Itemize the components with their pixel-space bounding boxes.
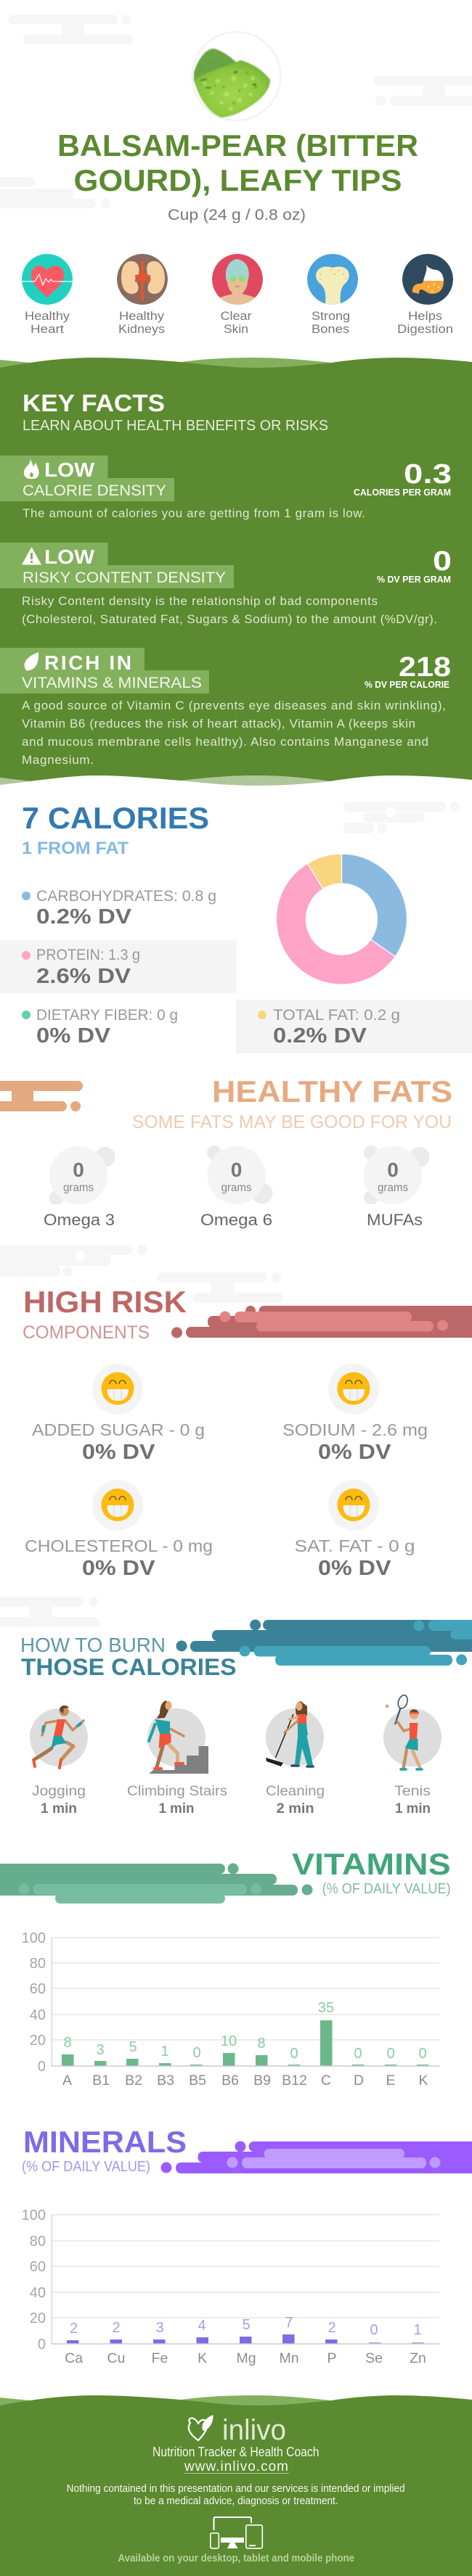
bar chart: minerals: 40	[30, 2285, 46, 2301]
heading: vitamins: VITAMINS	[292, 1847, 451, 1881]
serving size: Cup (24 g / 0.8 oz)	[168, 207, 306, 223]
callout: rich in vitamins and minerals: VITAMINS & MINERALS	[22, 674, 202, 691]
callout: risky content density: Risky Content density is the relationship of bad components	[22, 594, 378, 608]
activity: jogging: 1 min	[41, 1801, 77, 1816]
activity: tennis: 1 min	[395, 1801, 431, 1816]
activity: cleaning: 2 min	[277, 1801, 314, 1816]
bar chart: minerals: Se	[365, 2350, 383, 2366]
bar chart: minerals: 4	[198, 2318, 206, 2334]
tagline: Nutrition Tracker & Health Coach	[152, 2445, 320, 2459]
bar chart: vitamins: 0	[418, 2046, 427, 2062]
bar chart: vitamins: A	[62, 2073, 72, 2089]
bar chart: vitamins: K	[418, 2073, 428, 2089]
label: healthy kidneys: Healthy	[119, 309, 165, 323]
callout: rich in vitamins and minerals: Magnesium.	[22, 753, 94, 767]
legend: dietary fiber: DIETARY FIBER: 0 g	[36, 1007, 178, 1024]
bar chart: vitamins: B9	[253, 2073, 271, 2089]
bar chart: minerals: Zn	[410, 2350, 426, 2366]
callout: calorie density: The amount of calories you are getting from 1 gram is low.	[23, 506, 365, 520]
callout: rich in vitamins and minerals: A good source of Vitamin C (prevents eye diseases and skin wrinkling),	[22, 699, 446, 712]
bar chart: vitamins: B2	[125, 2073, 142, 2089]
bar chart: vitamins: B12	[282, 2073, 307, 2089]
heading: high risk: HIGH RISK	[23, 1285, 187, 1319]
bar chart: vitamins: 80	[30, 1956, 46, 1972]
stat: mufas: grams	[378, 1182, 408, 1194]
decorative band: minerals	[161, 2141, 472, 2173]
stat: mufas	[364, 1145, 430, 1229]
legend: total fat: TOTAL FAT: 0.2 g	[273, 1007, 400, 1024]
bar chart: minerals: 0	[370, 2322, 378, 2338]
bar chart: vitamins: B1	[92, 2073, 110, 2089]
heading: how to burn: HOW TO BURN	[20, 1634, 166, 1656]
stat: omega 3	[44, 1146, 115, 1229]
icon: healthy heart	[22, 254, 73, 305]
bar chart: vitamins: 0	[354, 2046, 362, 2062]
bar chart: vitamins: B5	[189, 2073, 206, 2089]
bar chart: vitamins: E	[386, 2073, 396, 2089]
bar chart: minerals: 2	[327, 2320, 336, 2336]
risk: sodium: SODIUM - 2.6 mg	[282, 1420, 428, 1439]
bar chart: vitamins: 8	[257, 2036, 266, 2052]
callout: risky content density: RISKY CONTENT DENSITY	[23, 569, 226, 586]
bar chart: minerals: Cu	[107, 2350, 125, 2366]
bar chart: minerals: 2	[70, 2321, 78, 2337]
bar chart: minerals: 100	[22, 2207, 46, 2223]
callout: risky content density: LOW	[44, 546, 95, 568]
risk: sodium	[282, 1364, 428, 1464]
activity: cleaning	[266, 1701, 325, 1816]
label: healthy heart: Healthy	[25, 309, 70, 323]
legend: protein: 2.6% DV	[36, 965, 131, 988]
callout: calorie density: CALORIE DENSITY	[23, 482, 166, 499]
food photo	[192, 32, 280, 120]
bar chart: vitamins: 100	[22, 1930, 46, 1946]
label: strong bones: Strong	[312, 309, 350, 323]
risk: saturated fat	[295, 1480, 415, 1580]
bar chart: minerals: 0	[38, 2337, 46, 2353]
subheading: components: COMPONENTS	[23, 1322, 150, 1343]
bar chart: vitamins	[22, 1930, 439, 2089]
bar chart: minerals: 3	[155, 2320, 164, 2336]
availability note: Available on your desktop, tablet and mobile phone	[118, 2552, 354, 2564]
heading: calories: 7 CALORIES	[22, 801, 209, 835]
callout: rich in vitamins and minerals: 218	[399, 652, 451, 683]
decorative band: vitamins	[0, 1863, 312, 1904]
label: strong bones: Bones	[312, 322, 349, 336]
risk: cholesterol	[25, 1480, 213, 1580]
legend: carbohydrates: CARBOHYDRATES: 0.8 g	[36, 888, 216, 905]
bar chart: minerals	[22, 2207, 439, 2366]
label: healthy kidneys: Kidneys	[118, 322, 165, 336]
stat: omega 3: grams	[63, 1182, 94, 1194]
bar chart: vitamins: 0	[290, 2046, 298, 2062]
callout: rich in vitamins and minerals	[0, 648, 451, 767]
risk: added sugar	[32, 1364, 205, 1464]
callout: risky content density: (Cholesterol, Saturated Fat, Sugars & Sodium) to the amount (%DV/gr).	[22, 612, 437, 626]
subheading: from fat: 1 FROM FAT	[22, 839, 129, 858]
decorative band: high risk	[171, 1306, 472, 1338]
risk: cholesterol: 0% DV	[82, 1557, 155, 1580]
legend: total fat	[236, 1000, 472, 1053]
risk: saturated fat: SAT. FAT - 0 g	[295, 1536, 415, 1555]
icon: strong bones	[307, 254, 358, 305]
stat: omega 6: Omega 6	[200, 1211, 272, 1229]
activity: tennis	[383, 1694, 442, 1816]
bar chart: vitamins: 0	[38, 2059, 46, 2075]
callout: risky content density: % DV PER GRAM	[377, 574, 451, 585]
bar chart: vitamins: 8	[63, 2035, 72, 2051]
label: helps digestion	[397, 309, 453, 336]
activity: climbing stairs: Climbing Stairs	[127, 1783, 227, 1799]
activity: jogging: Jogging	[32, 1783, 86, 1799]
risk: sodium: 0% DV	[318, 1441, 391, 1464]
activity: climbing stairs	[127, 1700, 227, 1816]
stat: omega 3: Omega 3	[44, 1211, 115, 1229]
icon: helps digestion	[402, 254, 453, 305]
risk: added sugar: 0% DV	[82, 1441, 155, 1464]
activity: climbing stairs: 1 min	[158, 1801, 195, 1816]
bar chart: vitamins: 35	[318, 2000, 334, 2016]
bar chart: vitamins: 10	[221, 2033, 237, 2049]
bar chart: vitamins: 20	[30, 2033, 46, 2049]
heading: minerals: MINERALS	[23, 2125, 187, 2159]
title	[57, 128, 418, 197]
label: clear skin: Clear	[221, 309, 252, 323]
activity: jogging	[30, 1705, 88, 1816]
title: GOURD), LEAFY TIPS	[74, 163, 402, 197]
icon: devices	[211, 2517, 262, 2548]
activity: cleaning: Cleaning	[266, 1783, 325, 1799]
logo: inlivo: inlivo	[222, 2414, 286, 2446]
bar chart: minerals: 60	[30, 2259, 46, 2275]
callout: rich in vitamins and minerals: Vitamin B6 (reduces the risk of heart attack), Vitamin A (keeps skin	[22, 717, 415, 731]
donut chart	[276, 854, 407, 984]
icon: healthy kidneys	[117, 254, 168, 305]
stat: mufas: 0	[387, 1159, 399, 1181]
disclaimer	[67, 2482, 405, 2507]
callout: risky content density	[0, 543, 452, 626]
callout: rich in vitamins and minerals: % DV PER CALORIE	[365, 679, 449, 690]
logo: inlivo	[189, 2414, 286, 2446]
stat: omega 6: 0	[231, 1159, 242, 1181]
bar chart: minerals: 20	[30, 2310, 46, 2326]
bar chart: minerals: 2	[112, 2320, 121, 2336]
stat: omega 6	[200, 1145, 273, 1229]
disclaimer: to be a medical advice, diagnosis or treatment.	[134, 2495, 338, 2507]
callout: calorie density: 0.3	[404, 459, 452, 490]
bar chart: minerals: Fe	[152, 2350, 168, 2366]
legend: carbohydrates	[22, 888, 216, 929]
heading: key facts: KEY FACTS	[23, 390, 165, 416]
bar chart: minerals: K	[198, 2350, 207, 2366]
risk: saturated fat: 0% DV	[318, 1557, 391, 1580]
legend: protein	[0, 940, 237, 993]
legend: total fat: 0.2% DV	[273, 1024, 367, 1048]
title: BALSAM-PEAR (BITTER	[57, 128, 418, 162]
callout: rich in vitamins and minerals: and mucous membrane cells healthy). Also contains Manganese and	[22, 735, 428, 749]
label: healthy kidneys	[118, 309, 165, 336]
callout: rich in vitamins and minerals: RICH IN	[44, 651, 131, 674]
stat: omega 6: grams	[221, 1182, 251, 1194]
bar chart: vitamins: 1	[160, 2044, 169, 2059]
callout: calorie density: LOW	[44, 458, 95, 481]
disclaimer: Nothing contained in this presentation and our services is intended or implied	[67, 2482, 405, 2495]
subheading: minerals: (% OF DAILY VALUE)	[22, 2159, 150, 2175]
subheading: healthy fats: SOME FATS MAY BE GOOD FOR YOU	[132, 1112, 452, 1132]
bar chart: vitamins: 60	[30, 1981, 46, 1997]
bar chart: vitamins: 3	[96, 2042, 105, 2058]
bar chart: minerals: Mg	[236, 2350, 256, 2366]
decorative band: healthy fats	[0, 1081, 83, 1111]
heading: healthy fats: HEALTHY FATS	[212, 1074, 452, 1108]
stat: mufas: MUFAs	[367, 1211, 423, 1229]
label: strong bones	[312, 309, 350, 336]
bar chart: vitamins: 5	[129, 2039, 137, 2055]
legend: dietary fiber	[22, 1007, 178, 1048]
subheading: key facts: LEARN ABOUT HEALTH BENEFITS OR RISKS	[23, 418, 328, 434]
bar chart: vitamins: B3	[157, 2073, 174, 2089]
panel: key facts	[0, 358, 472, 786]
legend: dietary fiber: 0% DV	[36, 1024, 110, 1048]
website link: www.inlivo.com	[184, 2459, 288, 2474]
bar chart: minerals: 80	[30, 2234, 46, 2250]
panel: footer	[0, 2395, 472, 2576]
label: clear skin: Skin	[224, 322, 248, 336]
bar chart: vitamins: B6	[221, 2073, 239, 2089]
callout: risky content density: 0	[433, 546, 452, 577]
label: healthy heart: Heart	[30, 322, 64, 336]
bar chart: minerals: 7	[285, 2315, 293, 2331]
callout: calorie density	[0, 456, 452, 520]
bar chart: minerals: Ca	[65, 2350, 83, 2366]
activity: tennis: Tenis	[394, 1783, 431, 1799]
bar chart: vitamins: D	[354, 2073, 364, 2089]
legend: protein: PROTEIN: 1.3 g	[36, 947, 140, 963]
bar chart: vitamins: 0	[192, 2045, 201, 2061]
bar chart: vitamins: C	[321, 2073, 331, 2089]
heading: those calories: THOSE CALORIES	[21, 1654, 237, 1680]
risk: added sugar: ADDED SUGAR - 0 g	[32, 1420, 205, 1439]
label: clear skin	[221, 309, 252, 336]
subheading: vitamins: (% OF DAILY VALUE)	[322, 1881, 451, 1897]
icon: clear skin	[212, 254, 263, 305]
callout: calorie density: CALORIES PER GRAM	[354, 487, 451, 498]
bar chart: vitamins: 40	[30, 2007, 46, 2023]
label: helps digestion: Helps	[408, 309, 442, 323]
bar chart: minerals: 5	[242, 2317, 251, 2333]
stat: omega 3: 0	[73, 1159, 84, 1181]
legend: carbohydrates: 0.2% DV	[36, 905, 131, 929]
bar chart: vitamins: 0	[386, 2046, 395, 2062]
bar chart: minerals: 1	[413, 2322, 422, 2338]
label: helps digestion: Digestion	[397, 322, 453, 336]
bar chart: minerals: Mn	[279, 2350, 299, 2366]
decorative band: burn calories	[176, 1619, 472, 1666]
bar chart: minerals: P	[327, 2350, 337, 2366]
risk: cholesterol: CHOLESTEROL - 0 mg	[25, 1536, 213, 1555]
label: healthy heart	[25, 309, 70, 336]
